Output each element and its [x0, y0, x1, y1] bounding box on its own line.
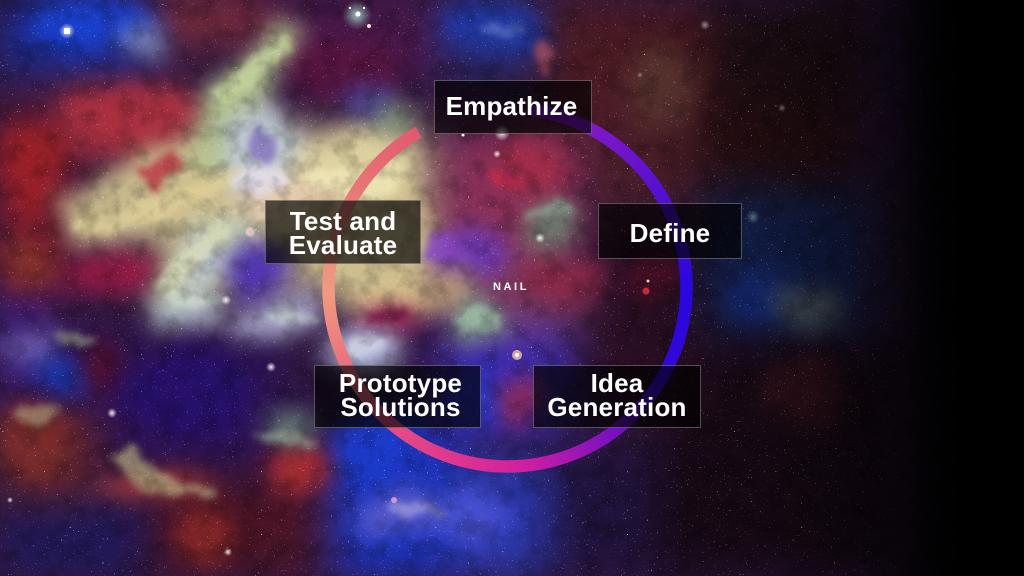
step: Empathize: Empathize — [446, 91, 577, 121]
step: Prototype Solutions: Solutions — [340, 392, 461, 422]
step: Idea Generation — [533, 365, 701, 428]
step: Idea Generation: Generation — [547, 392, 687, 422]
center label: NAIL: NAIL — [493, 281, 529, 293]
cycle ring — [322, 102, 693, 473]
step: Test and Evaluate: Test and — [290, 206, 396, 236]
step: Define — [598, 203, 742, 259]
step: Prototype Solutions — [314, 365, 481, 428]
step: Idea Generation: Idea — [591, 368, 643, 398]
step: Empathize — [434, 80, 592, 134]
step: Test and Evaluate: Evaluate — [289, 230, 397, 260]
step: Define: Define — [630, 218, 710, 248]
step: Prototype Solutions: Prototype — [339, 368, 462, 398]
step: Test and Evaluate — [265, 200, 421, 264]
